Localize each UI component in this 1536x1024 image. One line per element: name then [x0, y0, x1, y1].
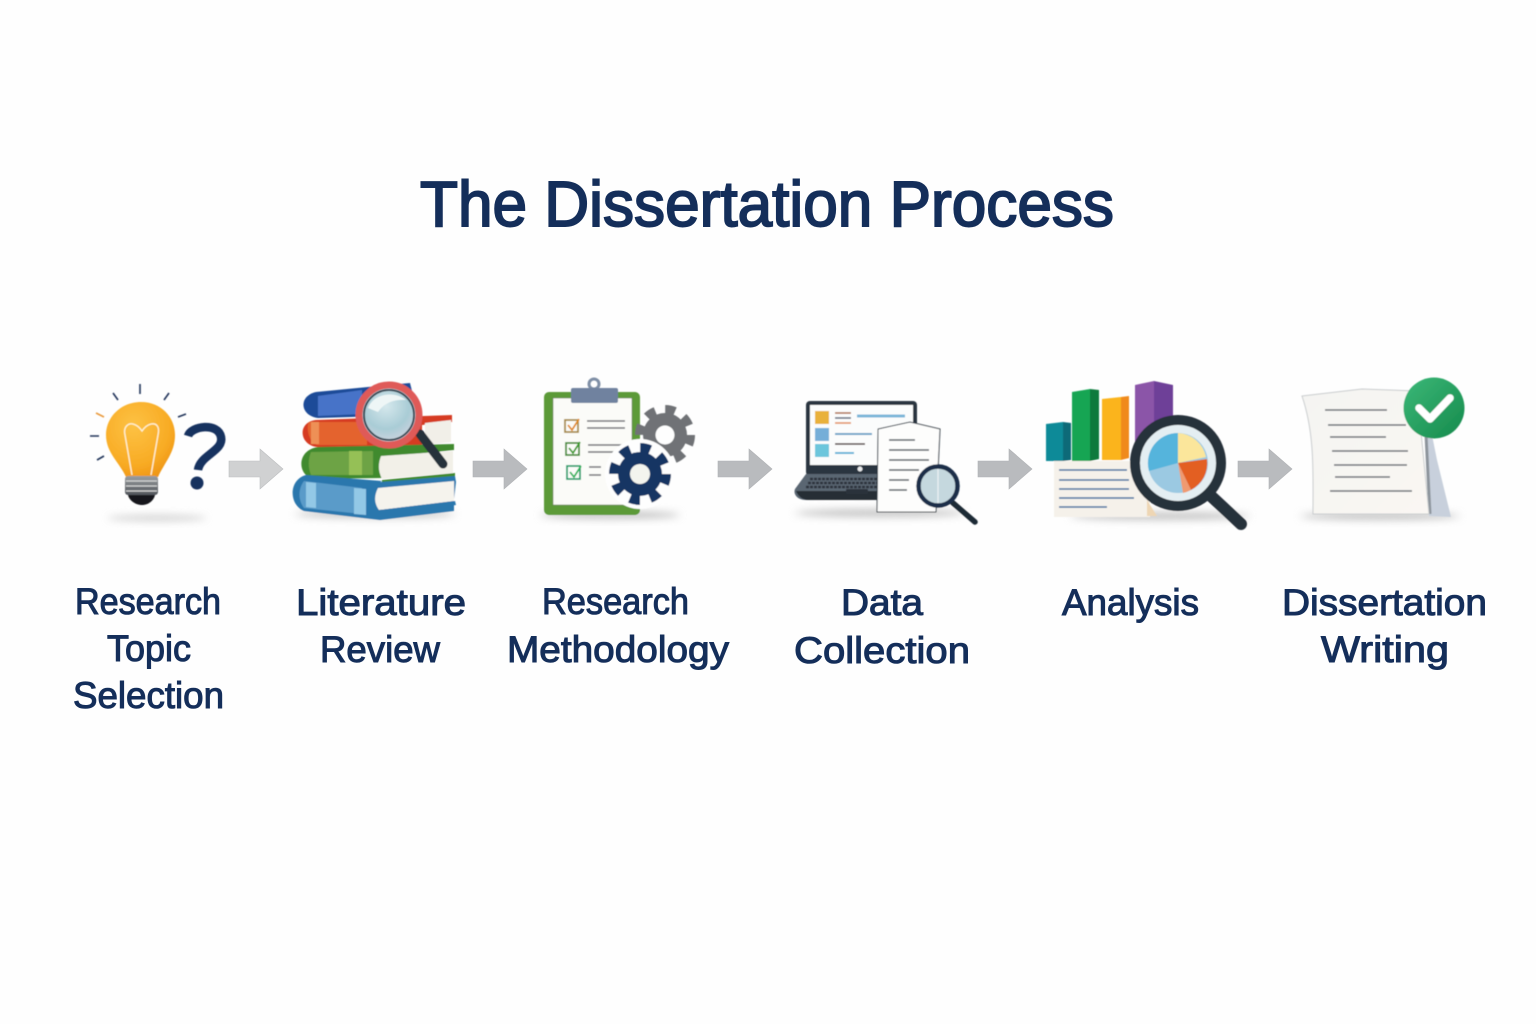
label: analysis: Analysis [1062, 582, 1199, 623]
label: data collection: Collection [794, 630, 970, 671]
arrow 3 [718, 449, 772, 489]
icon: bar chart with pie chart magnifier [1046, 381, 1250, 524]
icon: books with magnifier [293, 383, 456, 520]
label: literature review: Review [320, 629, 440, 670]
gear: gray [640, 410, 690, 460]
label: research topic selection: Selection [73, 675, 224, 716]
label: research topic selection: Topic [107, 628, 191, 669]
label: dissertation writing: Writing [1321, 629, 1449, 670]
label: dissertation writing: Dissertation [1282, 582, 1487, 623]
label: literature review [296, 582, 466, 670]
icon: laptop, document and magnifier [794, 401, 975, 522]
label: literature review: Literature [296, 582, 466, 623]
icon: clipboard with gears [540, 379, 690, 519]
label: data collection [794, 582, 970, 671]
label: research methodology: Methodology [507, 629, 730, 670]
label: research methodology [507, 581, 730, 670]
icon: light bulb with question mark [90, 384, 221, 521]
icon: written document with check badge [1300, 378, 1464, 520]
gear: navy [614, 448, 666, 500]
label: dissertation writing [1282, 582, 1487, 670]
arrow 1 [229, 449, 283, 489]
label: research topic selection: Research [75, 581, 221, 622]
label: data collection: Data [841, 582, 923, 623]
title: The Dissertation Process [420, 168, 1114, 240]
arrow 4 [978, 449, 1032, 489]
arrow 5 [1238, 449, 1292, 489]
label: research topic selection [73, 581, 224, 716]
arrow 2 [473, 449, 527, 489]
label: research methodology: Research [542, 581, 689, 622]
